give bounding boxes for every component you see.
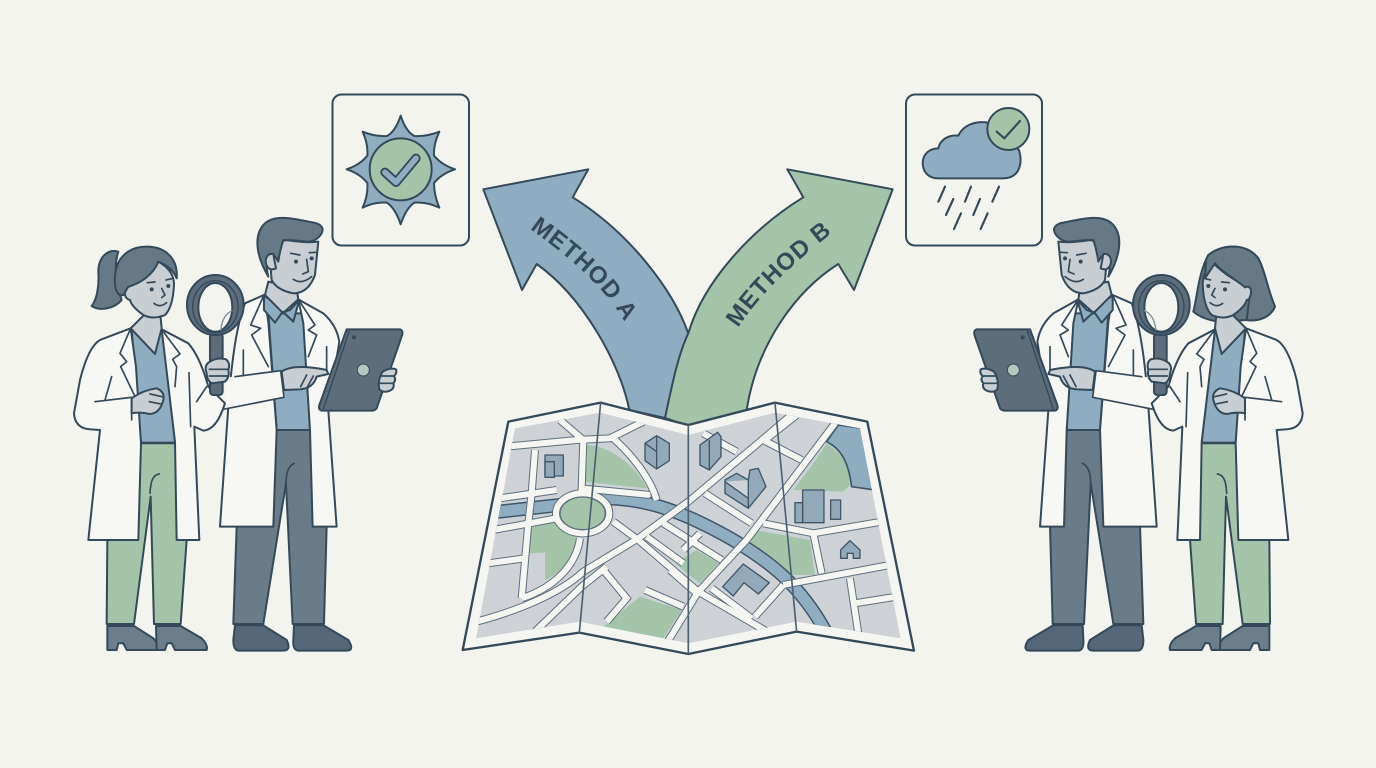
sleeve (1093, 371, 1153, 409)
icon: sun badge (347, 116, 455, 224)
trousers (233, 430, 327, 624)
icon panel: sun with check (332, 94, 469, 246)
hair fringe: woman, right (1205, 247, 1275, 320)
sweater (1067, 313, 1108, 430)
pointing hand (1048, 367, 1095, 390)
trousers (107, 443, 187, 624)
head (257, 218, 323, 293)
shoes (107, 626, 207, 650)
magnifying glass (187, 275, 244, 395)
arrow: Method B (664, 168, 894, 424)
scientist: man with tablet, right (974, 218, 1157, 651)
tablet (319, 329, 402, 411)
trousers (1050, 430, 1143, 624)
shoes (1025, 625, 1143, 651)
lab coat (220, 295, 339, 527)
neck and collar (264, 282, 299, 323)
trousers (1190, 443, 1270, 624)
head (1054, 218, 1119, 293)
scrub top (1202, 330, 1245, 443)
map buildings (545, 432, 860, 596)
scientist: man with tablet, left (220, 218, 402, 651)
label: METHOD A: METHOD A (531, 216, 635, 321)
icon panel: rain cloud with check (906, 94, 1042, 246)
scrub top (132, 330, 175, 443)
scientist: woman with magnifier, left (74, 247, 244, 650)
lab coat (74, 328, 225, 540)
sweater (268, 313, 310, 430)
neck and collar (1077, 282, 1113, 323)
head (115, 247, 177, 317)
map streets and parks (470, 407, 907, 650)
face (1203, 263, 1253, 317)
shoes (233, 625, 351, 651)
neck (131, 312, 162, 354)
arrow: Method A (482, 168, 688, 418)
neck (1215, 312, 1246, 354)
pointing hand (282, 367, 328, 390)
ponytail (92, 251, 122, 309)
sleeve (223, 371, 284, 409)
magnifying glass (1133, 275, 1190, 395)
lab coat (1037, 295, 1157, 527)
map paper (463, 403, 914, 654)
hand (1213, 388, 1245, 414)
map fold lines (579, 403, 797, 654)
tablet (974, 329, 1058, 411)
icon: rain cloud (923, 108, 1029, 229)
folded city map (463, 403, 914, 654)
lab coat (1152, 328, 1303, 540)
shoes (1170, 626, 1269, 650)
label: METHOD B: METHOD B (726, 223, 830, 327)
hand (132, 388, 164, 414)
hair back: woman, right (1193, 247, 1275, 322)
scientist: woman with magnifier, right (1133, 263, 1303, 650)
